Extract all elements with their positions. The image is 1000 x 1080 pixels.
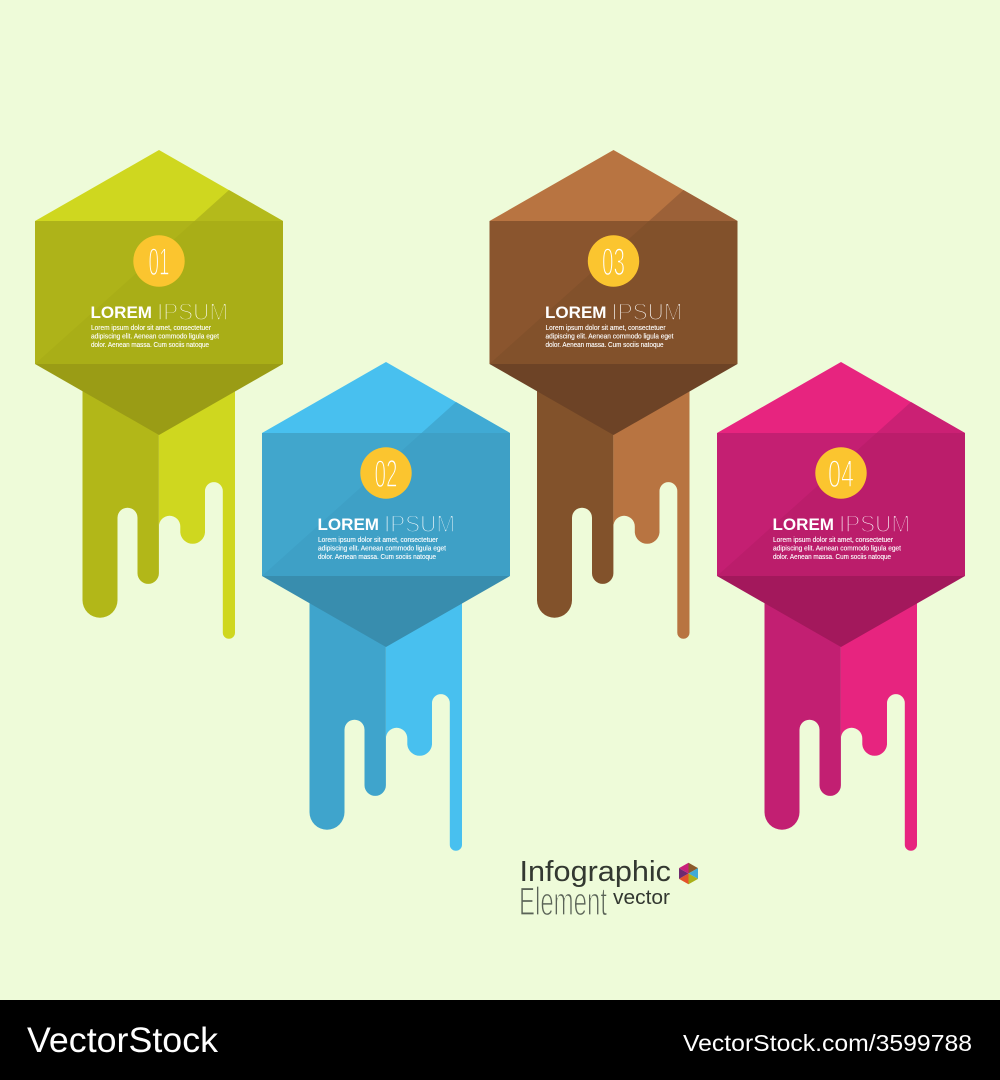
body text <box>773 537 901 561</box>
drips: olive <box>82 385 235 639</box>
number badge 04 <box>815 447 867 499</box>
panel: step 04 pink <box>717 362 965 851</box>
heading: lorem ipsum <box>90 299 228 326</box>
body text: dolor. Aenean massa. Cum sociis natoque <box>91 342 209 349</box>
hexagon: olive <box>35 150 283 435</box>
footer brand: VectorStock <box>27 1021 219 1060</box>
number badge 02 <box>360 447 412 499</box>
body text <box>546 325 674 349</box>
title: infographic element vector: Element <box>519 880 607 924</box>
hexagon: brown <box>490 150 738 435</box>
heading: lorem ipsum: IPSUM <box>839 511 910 538</box>
drips: blue <box>310 597 462 851</box>
number badge 03 <box>588 235 639 287</box>
number badge 02: 02 <box>374 453 398 496</box>
panel: step 02 blue <box>262 362 510 851</box>
panel: step 01 olive <box>35 150 283 639</box>
hexagon: pink <box>717 362 965 647</box>
drips: pink <box>764 597 917 851</box>
heading: lorem ipsum <box>318 511 455 538</box>
body text: Lorem ipsum dolor sit amet, consectetuer <box>773 537 894 544</box>
panel: step 03 brown <box>490 150 738 639</box>
body text: adipiscing elit. Aenean commodo ligula eget <box>546 334 674 340</box>
body text: adipiscing elit. Aenean commodo ligula eget <box>773 546 901 552</box>
heading: lorem ipsum: IPSUM <box>157 299 228 326</box>
footer image id: VectorStock.com/3599788 <box>683 1030 972 1056</box>
body text: dolor. Aenean massa. Cum sociis natoque <box>546 342 664 349</box>
hexagon: blue <box>262 362 510 647</box>
heading: lorem ipsum: LOREM <box>318 515 379 534</box>
title: infographic element vector: Infographic <box>520 856 671 888</box>
number badge 01: 01 <box>148 241 170 284</box>
body text: Lorem ipsum dolor sit amet, consectetuer <box>91 325 212 332</box>
body text: adipiscing elit. Aenean commodo ligula eget <box>318 546 446 552</box>
body text: Lorem ipsum dolor sit amet, consectetuer <box>318 537 439 544</box>
body text <box>91 325 219 349</box>
body text <box>318 537 446 561</box>
footer bar <box>0 1000 1000 1080</box>
heading: lorem ipsum <box>772 511 910 538</box>
body text: Lorem ipsum dolor sit amet, consectetuer <box>546 325 666 332</box>
title: infographic element vector <box>519 856 671 924</box>
drips: brown <box>537 385 690 639</box>
body text: dolor. Aenean massa. Cum sociis natoque <box>773 554 891 561</box>
number badge 01 <box>133 235 185 287</box>
icon: multicolour hexagon logo <box>679 863 698 884</box>
heading: lorem ipsum: LOREM <box>545 303 606 322</box>
heading: lorem ipsum: LOREM <box>90 303 152 322</box>
heading: lorem ipsum: LOREM <box>772 515 834 534</box>
number badge 03: 03 <box>602 241 625 284</box>
heading: lorem ipsum: IPSUM <box>612 299 682 326</box>
heading: lorem ipsum <box>545 299 682 326</box>
heading: lorem ipsum: IPSUM <box>384 511 455 538</box>
number badge 04: 04 <box>828 453 854 496</box>
body text: dolor. Aenean massa. Cum sociis natoque <box>318 554 436 561</box>
body text: adipiscing elit. Aenean commodo ligula eget <box>91 334 219 340</box>
title: infographic element vector: vector <box>613 886 670 909</box>
